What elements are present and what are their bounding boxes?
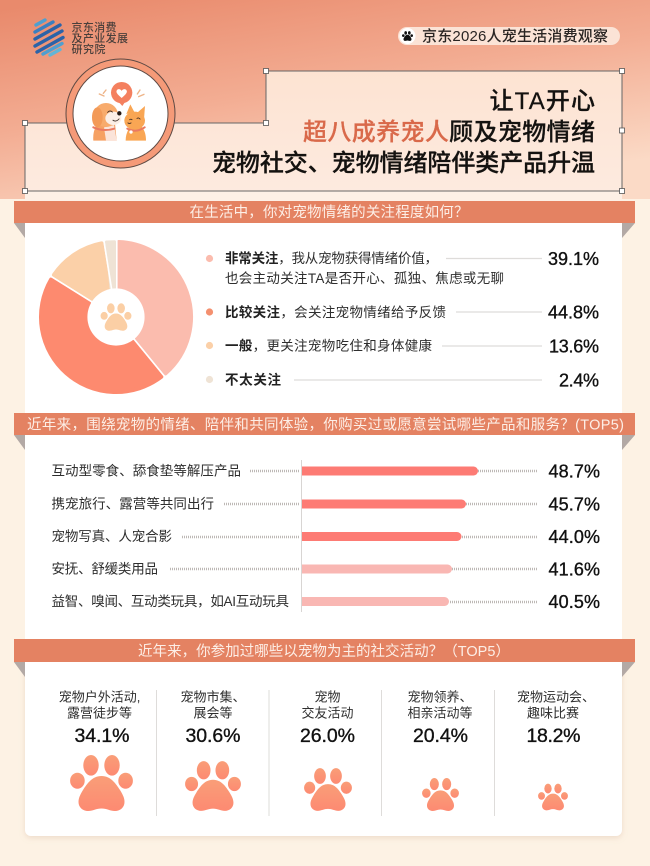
bar row 3: 宠物写真、人宠合影 xyxy=(52,529,172,544)
legend row: average: 13.6% xyxy=(549,336,599,356)
legend row: very concerned: 也会主动关注TA是否开心、孤独、焦虑或无聊 xyxy=(225,271,504,286)
logo text: 及产业发展 xyxy=(72,31,128,45)
icon: center paw xyxy=(101,303,131,331)
panel: products and services top 5 xyxy=(14,413,635,639)
report tag pill: 京东2026人宠生活消费观察 xyxy=(422,27,608,45)
card xyxy=(25,223,622,413)
legend row: fairly concerned xyxy=(206,302,599,322)
bar row 2: 45.7% xyxy=(548,494,600,514)
panel: social activities top 5 xyxy=(14,639,635,836)
legend row: fairly concerned: 44.8% xyxy=(548,302,599,322)
bar row 1: 互动型零食、舔食垫等解压产品 xyxy=(52,462,241,478)
legend row: not concerned: 不太关注 xyxy=(225,372,282,388)
column 2: 30.6% xyxy=(186,725,240,747)
logo text xyxy=(72,20,128,56)
logo: JD consumption institute xyxy=(35,20,128,56)
bar row 4 xyxy=(52,560,600,580)
column 2: 展会等 xyxy=(193,706,233,720)
bar row 2: 携宠旅行、露营等共同出行 xyxy=(52,496,214,512)
banner fold xyxy=(14,662,635,677)
banner fold xyxy=(14,435,635,450)
icon: paw 26.0 xyxy=(304,768,352,811)
icon: black paw xyxy=(402,31,413,41)
title text: 让TA开心 xyxy=(490,88,595,115)
column 1 xyxy=(59,690,140,811)
column 1: 34.1% xyxy=(74,725,130,747)
banner: question 1: 在生活中，你对宠物情绪的关注程度如何？ xyxy=(190,204,468,221)
column 5: 趣味比赛 xyxy=(527,706,579,720)
legend row: average: 一般，更关注宠物吃住和身体健康 xyxy=(225,338,432,354)
column 1: 露营徒步等 xyxy=(67,706,132,720)
column 3: 26.0% xyxy=(300,725,355,747)
bar row 5: 益智、嗅闻、互动类玩具，如AI互动玩具 xyxy=(52,594,289,609)
bar row 2 xyxy=(52,494,600,514)
icon: paw 20.4 xyxy=(422,778,459,811)
icon: paw 34.1 xyxy=(70,755,133,811)
column 2: 宠物市集、 xyxy=(180,690,246,704)
legend row: very concerned xyxy=(206,249,599,286)
logo text: 研究院 xyxy=(72,42,106,56)
header background xyxy=(0,0,650,199)
legend row: very concerned: 非常关注，我从宠物获得情绪价值， xyxy=(225,250,438,266)
title frame xyxy=(22,68,624,201)
column 4: 相亲活动等 xyxy=(407,706,473,720)
banner: question 3 xyxy=(14,639,635,662)
bar row 1: 48.7% xyxy=(548,462,600,482)
column 4: 宠物领养、 xyxy=(407,690,473,704)
column 3: 交友活动 xyxy=(301,706,354,720)
banner: question 2: 近年来，围绕宠物的情绪、陪伴和共同体验，你购买过或愿意尝试哪些产品和服务？(TOP5) xyxy=(27,416,624,434)
title text: 超八成养宠人顾及宠物情绪 xyxy=(303,119,595,146)
illustration: dog, cat and heart xyxy=(92,82,146,141)
column 5: 宠物运动会、 xyxy=(517,690,595,704)
banner: question 2 xyxy=(14,413,635,435)
icon: dog and cat medallion xyxy=(66,59,175,168)
banner fold xyxy=(14,223,635,238)
column 5 xyxy=(517,690,595,810)
bar row 3 xyxy=(52,527,600,547)
column 2 xyxy=(180,690,246,811)
logo text: 京东消费 xyxy=(72,20,116,34)
card xyxy=(25,662,622,836)
legend row: not concerned: 2.4% xyxy=(559,370,599,390)
bar row 3: 44.0% xyxy=(548,527,600,547)
legend row: very concerned: 39.1% xyxy=(548,249,599,269)
column 3 xyxy=(300,690,355,811)
banner: question 3: 近年来，你参加过哪些以宠物为主的社交活动？（TOP5） xyxy=(138,642,510,660)
panel: attention to pet emotions xyxy=(14,201,635,413)
legend row: not concerned xyxy=(206,370,599,390)
column 1: 宠物户外活动, xyxy=(59,690,140,704)
banner: question 1 xyxy=(14,201,635,223)
column 4 xyxy=(407,690,473,811)
column 4: 20.4% xyxy=(413,725,468,747)
legend row: average xyxy=(206,336,599,356)
bar row 4: 安抚、舒缓类用品 xyxy=(52,562,158,576)
bar row 5: 40.5% xyxy=(548,592,600,612)
bar row 4: 41.6% xyxy=(548,560,600,580)
legend row: fairly concerned: 比较关注，会关注宠物情绪给予反馈 xyxy=(225,304,446,320)
column 3: 宠物 xyxy=(314,690,341,704)
card xyxy=(25,435,622,639)
icon: paw 18.2 xyxy=(538,784,568,810)
bar row 5 xyxy=(52,592,600,612)
title text: 宠物社交、宠物情绪陪伴类产品升温 xyxy=(212,150,595,177)
bar row 1 xyxy=(52,462,600,482)
logo mark xyxy=(35,20,63,55)
donut chart xyxy=(41,235,191,392)
title text xyxy=(212,88,595,177)
icon: paw 30.6 xyxy=(185,761,241,811)
column 5: 18.2% xyxy=(526,725,580,747)
